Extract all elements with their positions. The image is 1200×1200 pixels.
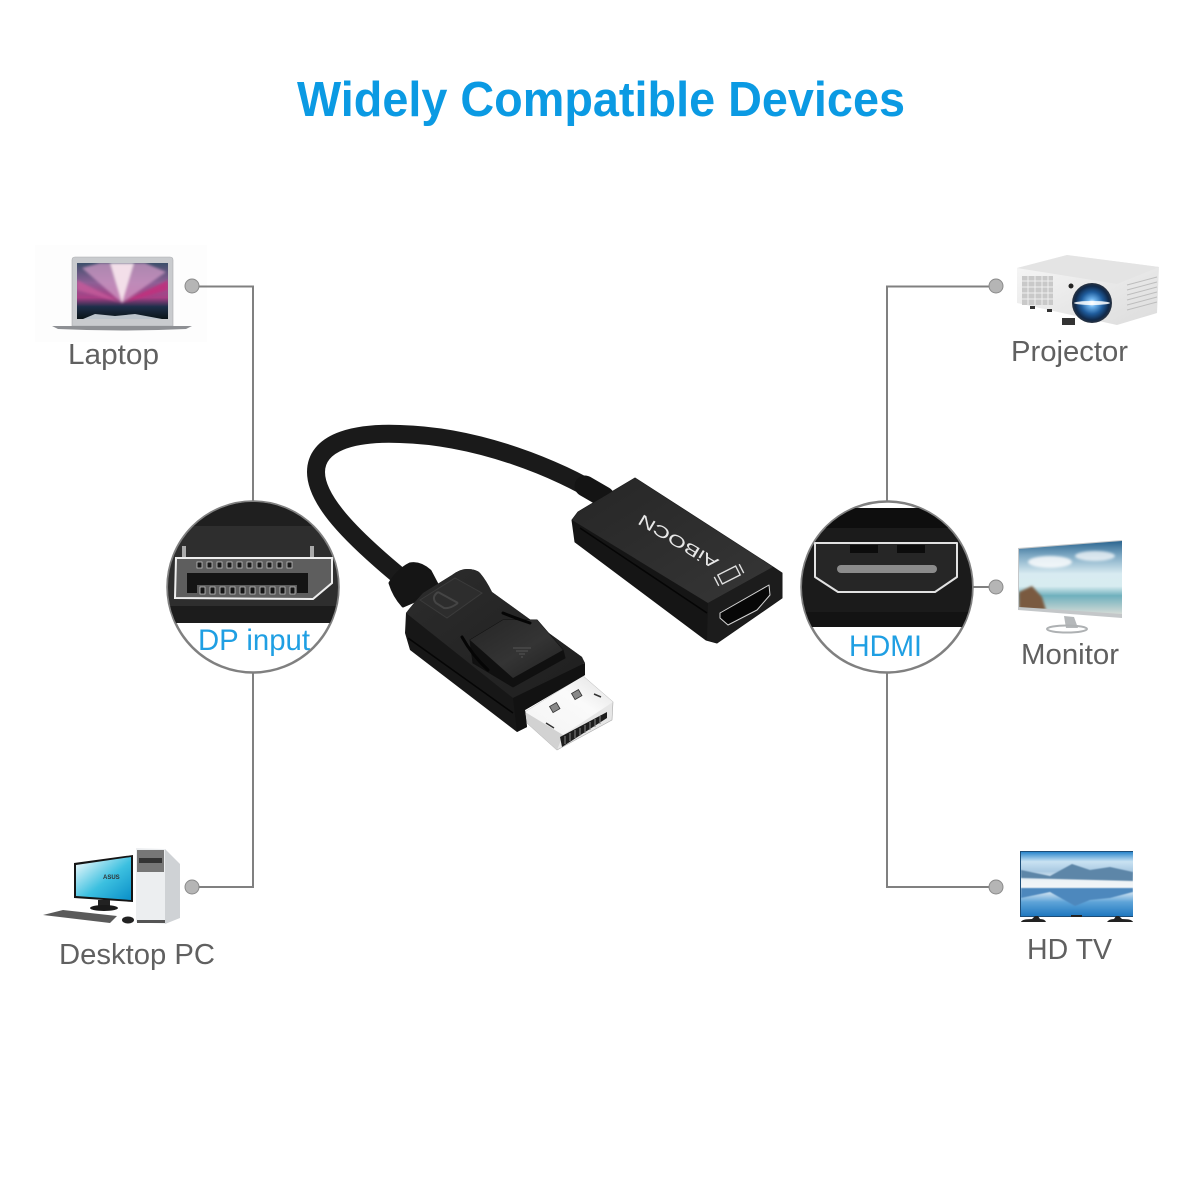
brand text: AiBOCN (636, 510, 722, 571)
connector end dots (185, 279, 1003, 894)
metal connector (525, 676, 613, 750)
icon: laptop (52, 257, 192, 330)
latch (462, 613, 565, 687)
icon: desktop PC: ASUS (103, 875, 120, 881)
label: Laptop: Laptop (68, 339, 159, 371)
label: DP input: DP input (198, 624, 311, 657)
panel: DP input close-up (160, 500, 350, 672)
label: Monitor: Monitor (1021, 639, 1119, 671)
strain relief (390, 564, 440, 606)
HDMI logo mark (714, 564, 744, 586)
laptop photo backdrop (35, 245, 207, 342)
label: HD TV: HD TV (1027, 934, 1113, 966)
DisplayPort socket (175, 558, 332, 599)
title: Widely Compatible Devices (297, 73, 905, 127)
connector lines: DP side (199, 286, 253, 887)
icon: HD TV (1020, 851, 1133, 922)
icon: monitor (1018, 540, 1122, 632)
panel: HDMI close-up (795, 502, 980, 672)
DP logo emboss (420, 578, 482, 618)
label: Projector: Projector (1011, 336, 1128, 368)
label: HDMI: HDMI (849, 630, 922, 663)
label: Desktop PC: Desktop PC (59, 939, 215, 971)
HDMI socket (815, 543, 957, 592)
adapter cable (316, 434, 782, 750)
HDMI adapter housing (572, 478, 782, 643)
icon: desktop PC (43, 848, 180, 924)
cable (316, 434, 600, 575)
icon: projector (1017, 255, 1159, 325)
connector lines: HDMI side (887, 286, 989, 887)
cable collar at adapter (585, 486, 604, 497)
DisplayPort plug (405, 569, 613, 750)
